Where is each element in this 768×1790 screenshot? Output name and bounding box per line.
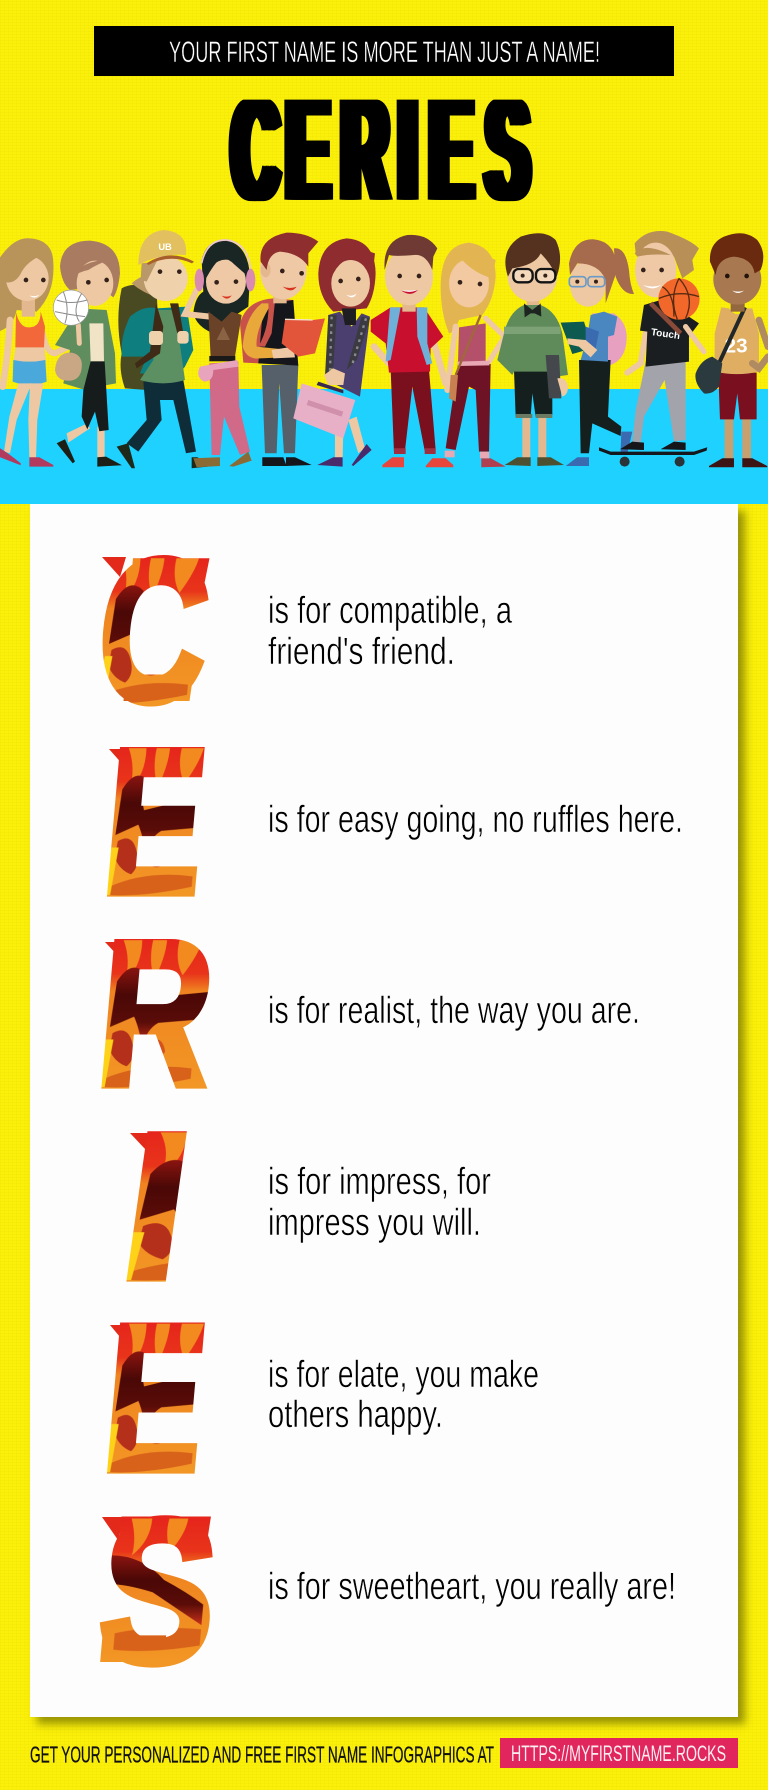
row 5: letter E: is for elate, you make: [268, 1354, 539, 1396]
row 1: letter C: friend's friend.: [268, 631, 455, 673]
row 6: letter S: S: [91, 1477, 226, 1706]
row 5: letter E: [96, 1282, 539, 1515]
person 10: girl with ponytail, glasses and pink backpack: [561, 239, 634, 466]
blue ground band: [0, 389, 768, 504]
title: name CERIES: E: [286, 69, 329, 232]
person 8: blonde girl with shoulder bag: [441, 243, 506, 467]
title: name CERIES: R: [342, 69, 388, 232]
row 5: letter E: others happy.: [268, 1394, 443, 1436]
row 4: letter I: [110, 1089, 491, 1322]
row 2: letter E: [96, 707, 683, 938]
row 4: letter I: I: [110, 1089, 204, 1322]
person 3: boy with hiking backpack and cap: [117, 230, 213, 468]
person 7: boy in red shirt with blue straps: [371, 235, 453, 467]
person 2: girl spinning a volleyball: [53, 241, 122, 467]
person 4: girl with headphones: [185, 240, 255, 467]
person 3: boy with hiking backpack and cap: UB: [158, 242, 172, 252]
row 5: letter E: E: [96, 1282, 214, 1515]
person 12: curly-haired boy in number 23 jersey: 23: [725, 335, 748, 358]
person 1: girl in orange top: [0, 238, 78, 467]
title: name CERIES: S: [486, 69, 529, 232]
row 1: letter C: C: [90, 518, 218, 745]
title: name CERIES: I: [399, 69, 417, 232]
row 4: letter I: is for impress, for: [268, 1161, 491, 1203]
header banner: [94, 26, 674, 76]
illustration: row of twelve students: [0, 230, 768, 468]
row 3: letter R: is for realist, the way you are.: [268, 990, 640, 1032]
row 1: letter C: [90, 518, 513, 745]
person 5: boy holding an orange book: [240, 233, 325, 466]
row 6: letter S: [91, 1477, 676, 1706]
row 3: letter R: R: [90, 898, 222, 1129]
title: name CERIES: E: [430, 69, 473, 232]
title: name CERIES: [228, 100, 533, 202]
person 11: skater with basketball: Touch: [650, 327, 681, 342]
person 9: boy with glasses in green sweater: [497, 233, 568, 466]
row 2: letter E: E: [96, 707, 214, 938]
row 3: letter R: [90, 898, 640, 1129]
person 6: red-haired girl with pink bag: [293, 238, 376, 467]
row 1: letter C: is for compatible, a: [268, 590, 513, 632]
person 12: curly-haired boy in number 23 jersey: [695, 233, 768, 467]
person 11: skater with basketball: [599, 231, 707, 467]
title: name CERIES: C: [232, 69, 278, 232]
row 4: letter I: impress you will.: [268, 1202, 481, 1244]
white content panel: [30, 504, 738, 1717]
